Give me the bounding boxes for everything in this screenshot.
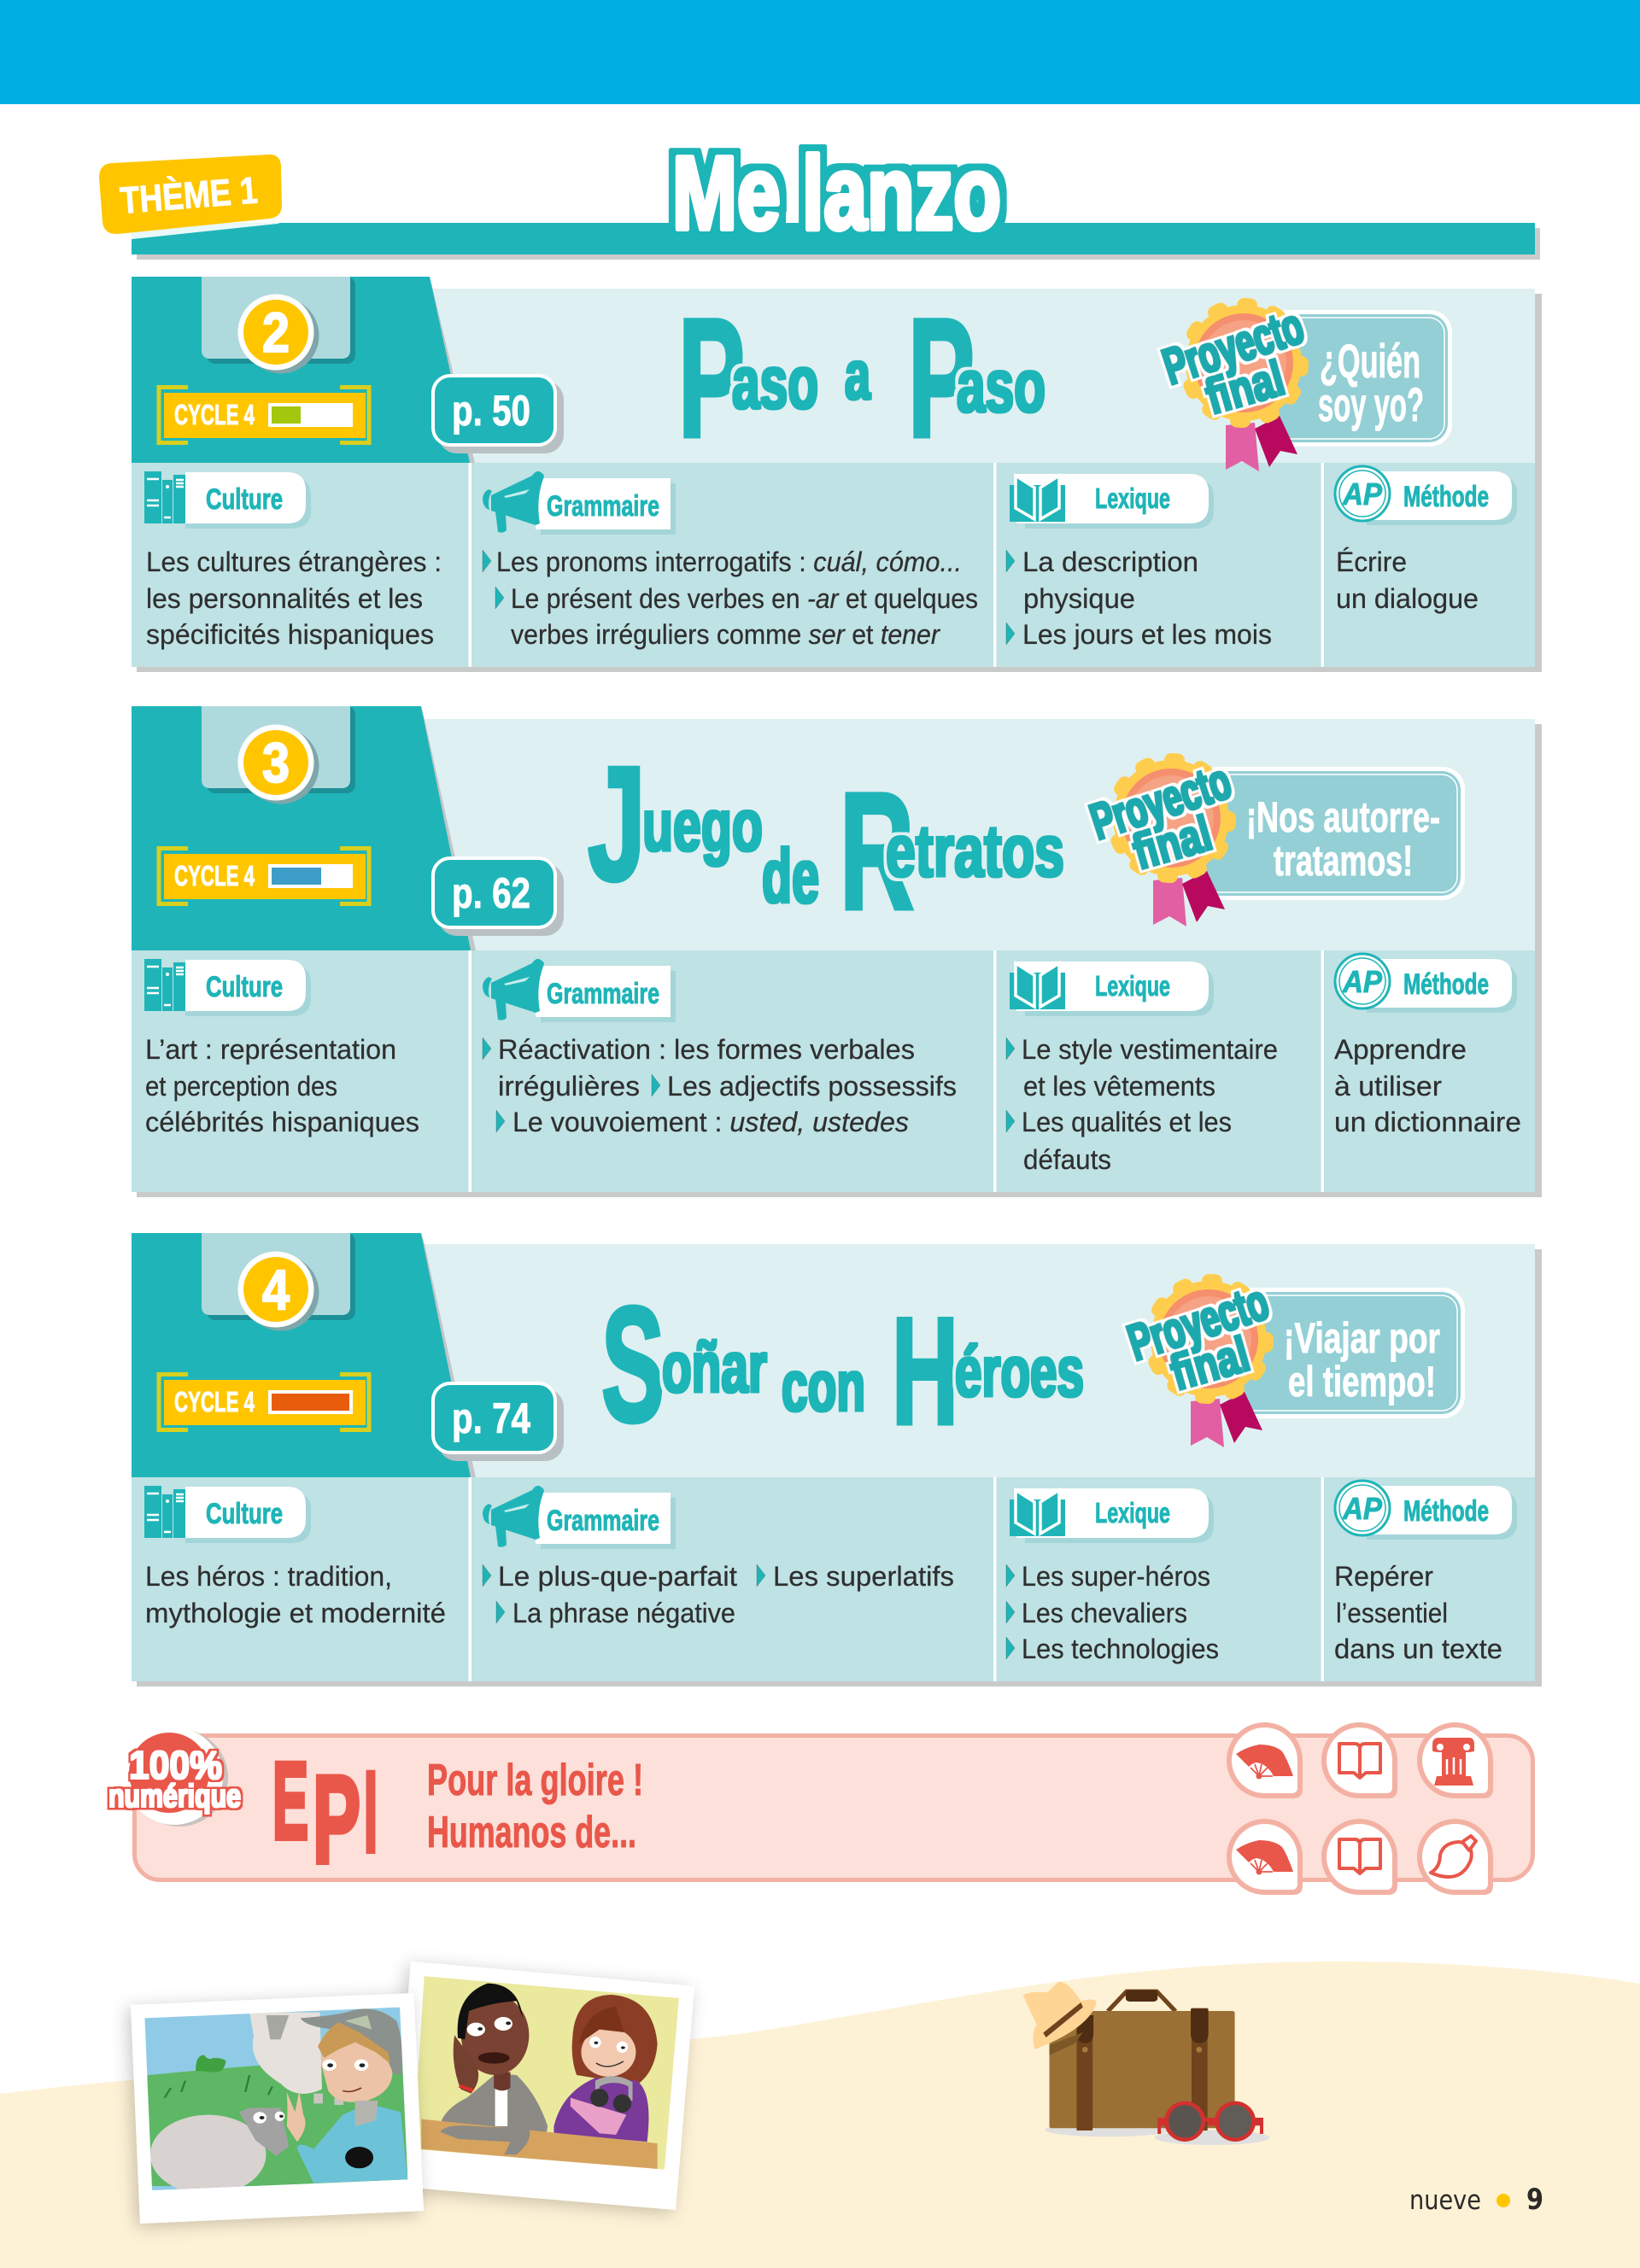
method label: Méthode [1403,1495,1489,1528]
method label: AP [1342,476,1383,511]
EPI background [135,1735,1532,1880]
page reference: p. 74 [452,1394,530,1442]
vocabulary label [1010,474,1214,529]
unit number [237,1252,319,1330]
vocabulary text [1006,1034,1278,1175]
culture text [145,1561,446,1628]
unit title: S [601,1272,665,1456]
page number: nueve [1409,2185,1481,2216]
culture label [144,1486,311,1543]
content background [132,950,1535,1192]
final project badge [1121,1273,1275,1447]
method label [1335,1481,1517,1540]
100% numérique badge [108,1727,241,1827]
culture text: Les héros : tradition, [145,1561,392,1592]
icon: brush [1417,1819,1493,1895]
final project badge [1156,297,1310,471]
method label: AP [1342,964,1383,999]
method text: un dictionnaire [1334,1107,1521,1137]
unit title: éroes [955,1331,1084,1412]
page number [1409,2183,1543,2217]
unit title: P [908,284,975,472]
header background [419,1244,1535,1477]
final project badge: Proyecto [1083,752,1238,850]
cycle indicator: CYCLE 4 [174,399,255,430]
vocabulary text: physique [1023,583,1135,614]
theme label: THÈME 1 [119,168,259,222]
EPI logo [272,1740,378,1889]
photo: boy and girl at a table [392,1961,694,2210]
unit title: a [845,336,871,414]
panel: unit 4 Soñar con Héroes [132,1233,1542,1686]
method label: AP [1342,1491,1383,1526]
grammar label: Grammaire [547,978,659,1010]
vocabulary label: Lexique [1095,970,1170,1002]
theme badge [97,144,289,241]
final project box: ¡Nos autorre- [1246,793,1440,841]
method label: Méthode [1403,481,1489,513]
unit number: 3 [262,731,290,794]
vocabulary text: Les super-héros [1022,1561,1210,1592]
method text [1336,547,1479,614]
vocabulary text: et les vêtements [1023,1071,1215,1102]
vocabulary label: Lexique [1095,1497,1170,1529]
grammar label [483,471,676,535]
method text: Repérer [1334,1561,1433,1592]
cycle indicator: CYCLE 4 [174,1386,255,1418]
icon: fan top [1227,1722,1303,1798]
cycle indicator [159,1375,369,1429]
EPI logo: P [313,1750,360,1889]
final project box [1264,310,1452,447]
page reference: p. 62 [452,869,530,917]
illustration: suitcase, hat and sunglasses [1023,1982,1269,2145]
method text: Écrire [1336,547,1407,577]
vocabulary text [1006,1561,1219,1664]
vocabulary text: Les jours et les mois [1022,619,1272,650]
page number: 9 [1526,2183,1543,2217]
final project badge: Proyecto [1156,297,1310,395]
vocabulary text: Les technologies [1022,1634,1219,1664]
method text [1334,1561,1502,1664]
grammar label: Grammaire [547,1505,659,1537]
culture text: mythologie et modernité [145,1598,446,1628]
culture text [145,1034,419,1137]
cycle indicator [159,849,369,903]
culture label: Culture [206,483,283,516]
method label [1335,954,1517,1013]
panel: unit 3 Juego de Retratos [132,706,1542,1197]
culture label [144,959,311,1016]
unit title: R [840,758,914,944]
icon: fan bottom [1227,1819,1303,1895]
final project box [1196,767,1465,900]
icon: column [1417,1722,1493,1798]
unit title [678,284,1046,472]
unit title: aso [732,340,818,424]
teal corner header [132,706,476,950]
final project badge: final [1127,805,1218,880]
culture text [146,547,442,650]
panel shadow [137,1249,1542,1686]
unit title: aso [957,343,1046,428]
vocabulary text [1006,547,1272,650]
method label: Méthode [1403,968,1489,1001]
culture label [144,471,311,529]
vocabulary label [1010,1488,1214,1543]
culture label: Culture [206,1498,283,1530]
culture text: spécificités hispaniques [146,619,434,650]
grammar label [483,1486,676,1549]
grammar text [483,1561,954,1628]
EPI titles [427,1756,643,1857]
100% numérique badge: 100% [129,1743,222,1787]
final project badge: Proyecto [1121,1273,1275,1371]
unit number [237,294,319,374]
teal corner header [132,1233,476,1477]
final project badge [1083,752,1238,926]
unit title: oñar [662,1327,767,1407]
grammar text: Le présent des verbes en -ar et quelques [511,583,978,614]
panel: unit 2 Paso a Paso [132,277,1542,672]
culture text: Les cultures étrangères : [146,547,442,577]
vocabulary text: La description [1022,547,1198,577]
final project box: ¿Quién [1320,334,1420,388]
unit title: H [892,1286,958,1456]
vocabulary text: défauts [1023,1144,1111,1175]
grammar text [483,1034,957,1137]
final project box: el tiempo! [1288,1358,1436,1406]
EPI titles: Pour la gloire ! [427,1756,643,1805]
content background [132,1477,1535,1681]
page reference [433,1383,564,1461]
icon: book bottom [1321,1819,1397,1895]
unit title: uego [642,785,763,867]
icon: book top [1321,1722,1397,1798]
method label [1335,466,1517,525]
final project box [1230,1288,1465,1418]
EPI logo: E [272,1740,308,1862]
cycle indicator [159,388,369,442]
final project box: soy yo? [1318,377,1424,431]
unit title [601,1272,1084,1456]
culture text: L’art : représentation [145,1034,396,1065]
vocabulary text: Les chevaliers [1022,1598,1187,1628]
culture text: les personnalités et les [146,583,423,614]
vocabulary text: Le style vestimentaire [1022,1034,1278,1065]
panel shadow [137,724,1542,1197]
panel: EPI: I [364,1749,378,1876]
grammar text: verbes irréguliers comme ser et tener [511,619,940,650]
grammar text: Le vouvoiement : usted, ustedes [512,1107,909,1137]
photo: boy with sheep [131,1993,424,2224]
panel: EPI [108,1722,1532,1895]
grammar text: irrégulières [498,1071,640,1102]
unit title: etratos [886,810,1064,892]
unit title: con [782,1346,865,1426]
title: Me lanzo: Me lanzo [672,135,1001,251]
method text [1334,1034,1521,1137]
top blue band [0,0,1640,104]
final project box: ¡Viajar por [1284,1314,1440,1362]
panel shadow [137,294,1542,672]
culture text: célébrités hispaniques [145,1107,419,1137]
page reference: p. 50 [452,387,530,435]
teal corner header [132,277,475,463]
grammar text [483,547,978,650]
culture label: Culture [206,971,283,1003]
method text: un dialogue [1336,583,1479,614]
method text: Apprendre [1334,1034,1467,1065]
unit number: 2 [262,301,290,364]
grammar text: Les pronoms interrogatifs : cuál, cómo... [496,547,962,577]
header background [419,719,1535,950]
method text: dans un texte [1334,1634,1502,1664]
grammar text: Réactivation : les formes verbales [498,1034,915,1065]
grammar text: Les superlatifs [773,1561,954,1592]
content background [132,463,1535,667]
unit title: P [678,284,745,472]
header background [427,289,1535,463]
unit title [588,734,1064,944]
unit number [237,724,319,804]
vocabulary label [1010,962,1214,1016]
100% numérique badge: numérique [108,1779,241,1815]
grammar text: Les adjectifs possessifs [667,1071,957,1102]
unit number: 4 [262,1258,290,1321]
method text: à utiliser [1334,1071,1442,1102]
vocabulary text: Les qualités et les [1022,1107,1232,1137]
vocabulary label: Lexique [1095,482,1170,514]
cycle indicator: CYCLE 4 [174,860,255,891]
page reference [433,858,564,936]
page reference [433,376,564,453]
grammar label: Grammaire [547,490,659,523]
final project badge: final [1164,1326,1256,1401]
final project badge: final [1199,350,1291,425]
unit title: J [588,734,646,915]
title band [132,223,1540,260]
culture text: et perception des [145,1071,337,1102]
grammar text: Le plus-que-parfait [498,1561,737,1592]
sand background hill [0,1961,1640,2268]
grammar text: La phrase négative [512,1598,735,1628]
final project box: tratamos! [1274,837,1413,885]
EPI titles: Humanos de... [427,1808,636,1857]
method text: l’essentiel [1336,1598,1448,1628]
unit title: de [762,834,819,920]
grammar label [483,959,676,1022]
